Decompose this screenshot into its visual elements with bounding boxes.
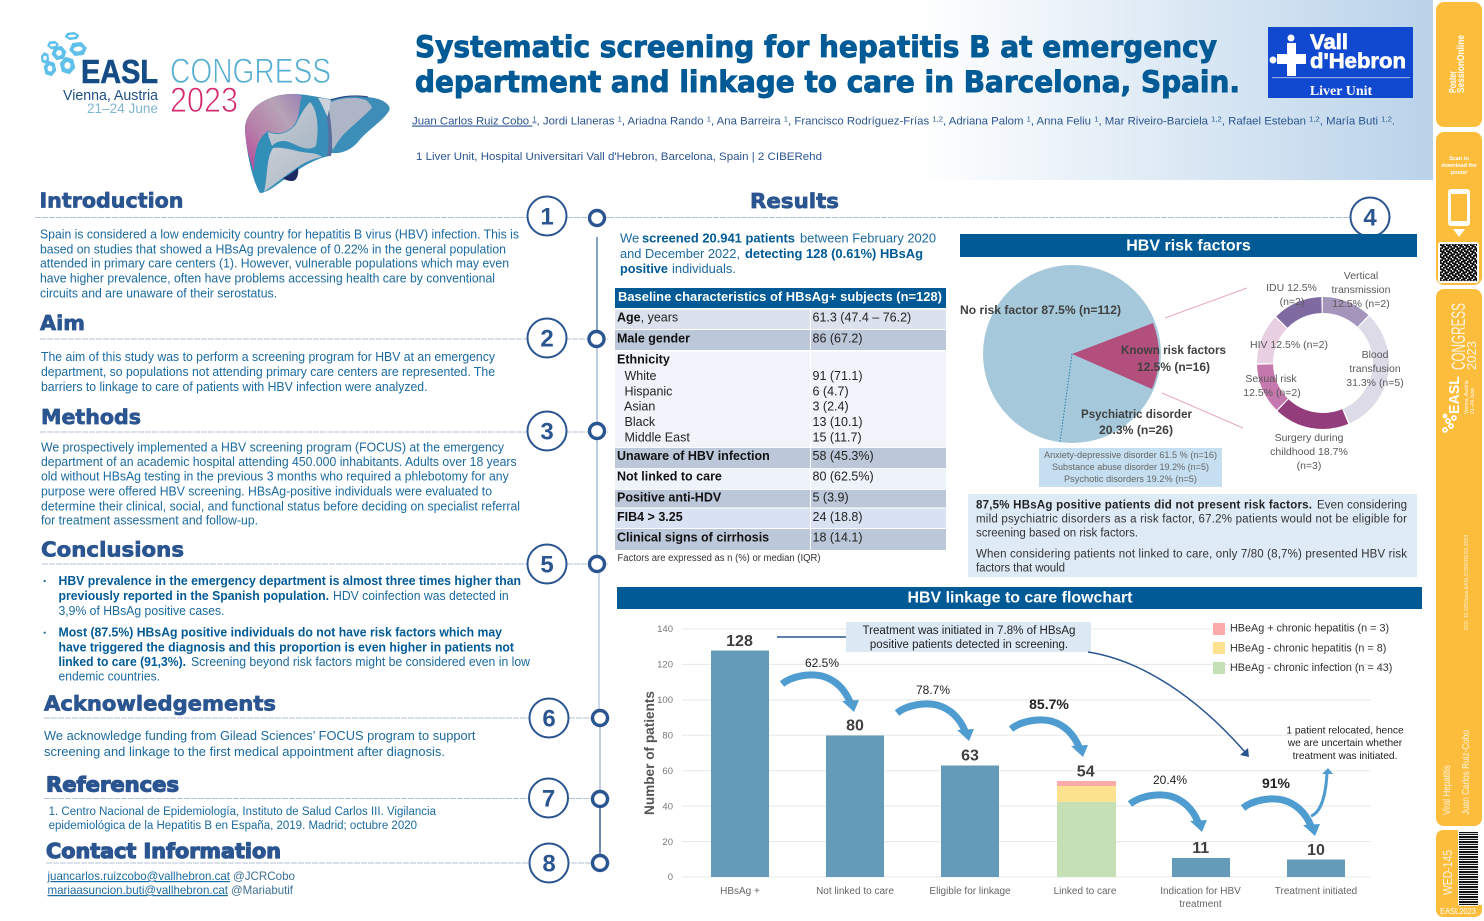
callout: risk factors finding: Even considering: [1317, 499, 1407, 511]
panel: poster info: EASL: [1446, 376, 1463, 414]
percentage labels: 91%: [1262, 775, 1291, 791]
category labels: Not linked to care: [816, 886, 894, 897]
table: baseline characteristics: 58 (45.3%): [812, 449, 874, 463]
numbered markers: 1: [540, 204, 554, 230]
authors: 1,2: [932, 114, 943, 124]
table: baseline characteristics: 6 (4.7): [812, 384, 849, 398]
panel: poster number: [1436, 830, 1482, 917]
text: aim body: barriers to linkage to care of patients with HBV infection were analyzed.: [41, 380, 428, 394]
text: acknowledgements body: We acknowledge funding from Gilead Sciences’ FOCUS program to support: [44, 729, 476, 743]
table: baseline characteristics: Age, years: [617, 311, 678, 325]
table: baseline characteristics: Black: [624, 415, 656, 429]
chart gridlines and axis: 140: [657, 624, 673, 635]
table: baseline characteristics: Unaware of HBV infection: [617, 449, 770, 463]
EASL Congress logo: 21–24 June: [87, 100, 158, 116]
text: aim body: [41, 350, 496, 394]
donut labels: childhood 18.7%: [1270, 446, 1348, 458]
donut chart: risk factor breakdown: [1241, 281, 1405, 445]
chart gridlines and axis: Number of patients: [641, 691, 657, 815]
callout: risk factors finding: [968, 494, 1417, 577]
donut labels: 12.5% (n=2): [1332, 298, 1390, 310]
bar value labels: [726, 633, 1325, 859]
table: baseline characteristics: Positive anti-HDV: [617, 491, 722, 505]
affiliations: 1 Liver Unit, Hospital Universitari Vall d'Hebron, Barcelona, Spain | 2 CIBERehd: [416, 151, 822, 163]
text: contact details: juancarlos.ruizcobo@vallhebron.cat: [47, 869, 231, 883]
panel: poster info: Viral Hepatitis: [1442, 765, 1453, 815]
table: baseline characteristics: Baseline characteristics of HBsAg+ subjects (n=128): [618, 290, 942, 304]
numbered markers: [528, 196, 1390, 882]
callout: treatment initiated: Treatment was initiated in 7.8% of HBsAg: [862, 625, 1076, 637]
pie labels: Psychiatric disorder: [1081, 407, 1192, 421]
numbered markers: 7: [542, 786, 555, 812]
authors: , Rafael Esteban: [1222, 116, 1309, 128]
panel: scan to download: poster: [1451, 170, 1468, 176]
pie labels: 12.5% (n=16): [1137, 360, 1210, 374]
percentage labels: 85.7%: [1029, 696, 1069, 712]
percentage labels: [805, 656, 1291, 791]
text: methods body: old without HBsAg testing in the previous 3 months who required a phlebotomy for any: [41, 470, 509, 484]
text: results summary: between February 2020: [800, 230, 936, 245]
legend: HBeAg - chronic infection (n = 43): [1230, 662, 1392, 674]
section divider lines: [35, 218, 1392, 863]
donut labels: (n=2): [1280, 296, 1304, 308]
authors: .: [1392, 116, 1395, 128]
heading bar: flowchart: [617, 587, 1422, 609]
table: baseline characteristics: FIB4 > 3.25: [617, 510, 683, 524]
panel: scan to download: [1436, 132, 1482, 285]
callout: risk factors finding: mild psychiatric disorders as a risk factor, 67.2% patients would not be eligible for: [976, 513, 1407, 525]
text: conclusions bullets: have triggered the diagnosis and this proportion is even higher in patients not: [58, 641, 515, 655]
Vall d'Hebron logo: [1268, 27, 1413, 99]
text: introduction body: based on studies that showed a HBsAg prevalence of 0.22% in the general population: [40, 243, 506, 257]
pie labels: No risk factor 87.5% (n=112): [960, 303, 1121, 317]
table: baseline characteristics: 61.3 (47.4 – 76.2): [812, 311, 911, 325]
heading: Conclusions: Conclusions: [41, 538, 184, 562]
donut labels: Sexual risk: [1245, 373, 1297, 385]
EASL Congress logo: EASL: [81, 53, 158, 90]
text: acknowledgements body: [44, 729, 476, 759]
authors: , Francisco Rodríguez-Frías: [788, 116, 932, 128]
panel: acknowledgements: [44, 692, 476, 759]
text: methods body: for treatment assessment and follow-up.: [41, 514, 258, 528]
authors: , Adriana Palom: [943, 116, 1027, 128]
panel: poster info: 21–24 June: [1470, 388, 1476, 414]
bar value labels: 128: [726, 633, 753, 650]
title: Systematic screening for hepatitis B at emergency: [415, 30, 1217, 64]
Vall d'Hebron logo: Vall: [1310, 31, 1348, 54]
psychiatric disorder breakdown: [1039, 448, 1222, 487]
text: methods body: [41, 441, 520, 528]
text: methods body: department of an academic hospital attending 450.000 inhabitants. Adults over 18 years: [41, 455, 517, 469]
donut labels: Blood: [1362, 349, 1389, 361]
table: baseline characteristics: White: [624, 369, 656, 383]
panel: scan to download: Scan to: [1449, 156, 1470, 162]
panel: references: [46, 773, 437, 832]
chart gridlines and axis: 20: [662, 837, 673, 848]
category labels: treatment: [1179, 899, 1222, 910]
authors: 1: [707, 114, 711, 124]
donut labels: (n=3): [1297, 460, 1321, 472]
legend: HBeAg + chronic hepatitis (n = 3): [1230, 623, 1389, 635]
text: conclusions bullets: Most (87.5%) HBsAg positive individuals do not have risk factors which may: [58, 626, 502, 640]
panel: poster info: 2023: [1464, 341, 1479, 370]
text: results summary: [620, 230, 936, 276]
text: conclusions bullets: HBV prevalence in the emergency department is almost three times higher than: [58, 574, 521, 588]
text: results summary: and December 2022,: [620, 246, 740, 261]
authors: 1: [1027, 114, 1031, 124]
panel: poster number: EASL2023: [1440, 907, 1477, 916]
icon: EASL hexagons: [40, 32, 88, 77]
donut labels: transfusion: [1349, 363, 1401, 375]
table: baseline characteristics: Factors are expressed as n (%) or median (IQR): [618, 553, 820, 564]
text: contact details: mariaasuncion.buti@vallhebron.cat: [48, 883, 229, 897]
table: baseline characteristics: 86 (67.2): [812, 332, 863, 346]
chart gridlines and axis: 120: [657, 660, 673, 670]
table: baseline characteristics: 24 (18.8): [812, 510, 863, 524]
authors: 1: [784, 114, 788, 124]
table: baseline characteristics: Male gender: [617, 332, 690, 346]
panel: scan to download: download the: [1441, 163, 1477, 169]
arrows: step transitions: [782, 675, 1320, 836]
text: conclusions bullets: [44, 574, 531, 684]
panel: poster info: Juan Carlos Ruiz-Cobo: [1461, 730, 1472, 815]
numbered markers: 8: [542, 850, 556, 878]
table: baseline characteristics: [615, 288, 946, 564]
heading bar: flowchart: HBV linkage to care flowchart: [908, 590, 1133, 606]
text: contact details: [47, 869, 295, 897]
pie labels: [960, 303, 1226, 437]
table: baseline characteristics: 80 (62.5%): [812, 470, 874, 484]
panel: poster info: CONGRESS: [1449, 303, 1470, 370]
text: introduction body: attended in primary care centers (1). However, vulnerable populations which may even: [40, 257, 509, 271]
authors: , María Buti: [1320, 116, 1381, 128]
numbered markers: 6: [542, 706, 556, 732]
heading: Contact Information: Contact Information: [46, 839, 281, 863]
authors: 1: [618, 114, 622, 124]
icon: liver illustration: [245, 94, 390, 193]
text: conclusions bullets: HDV coinfection was detected in: [333, 589, 509, 603]
authors: 1,2: [1309, 114, 1320, 124]
authors: Juan Carlos Ruiz Cobo: [412, 114, 537, 128]
text: methods body: determine their clinical, social, and functional status before deciding on specialist referral: [41, 500, 520, 514]
heading bar: HBV risk factors: [960, 234, 1417, 257]
panel: poster session online: Poster: [1448, 71, 1459, 93]
text: introduction body: [40, 228, 519, 301]
text: contact details: @JCRCobo: [233, 869, 295, 883]
pie labels: Known risk factors: [1121, 343, 1226, 357]
Vall d'Hebron logo: Liver Unit: [1310, 84, 1373, 99]
panel: introduction: [40, 188, 519, 301]
text: conclusions bullets: linked to care (91,3%).: [58, 655, 186, 669]
heading: Introduction: Introduction: [40, 188, 184, 212]
panel: contact information: [46, 839, 295, 897]
table: baseline characteristics: Hispanic: [624, 384, 672, 398]
text: conclusions bullets: endemic countries.: [58, 670, 160, 684]
text: conclusions bullets: 3,9% of HBsAg positive cases.: [58, 604, 224, 618]
chart gridlines and axis: 60: [662, 766, 673, 777]
text: methods body: We prospectively implemented a HBV screening program (FOCUS) at the emergency: [41, 441, 505, 455]
percentage labels: 20.4%: [1153, 773, 1187, 787]
panel: HBV risk factors: [960, 234, 1417, 577]
text: aim body: department, so populations not attending primary care centers are represented. The: [41, 365, 495, 379]
authors: 1,2: [1381, 114, 1392, 124]
text: aim body: The aim of this study was to perform a screening program for HBV at an emergency: [41, 350, 496, 364]
numbered markers: 2: [540, 326, 554, 352]
text: conclusions bullets: Screening beyond risk factors might be considered even in low: [191, 655, 531, 669]
text: reference entry: [49, 806, 437, 832]
psychiatric disorder breakdown: Anxiety-depressive disorder 61.5 % (n=16): [1044, 450, 1217, 461]
category labels: HBsAg +: [720, 886, 760, 897]
numbered markers: 4: [1363, 204, 1377, 232]
authors: , Ana Barreira: [711, 116, 784, 128]
category labels: Eligible for linkage: [929, 886, 1011, 897]
text: reference entry: epidemiológica de la Hepatitis B en España, 2019. Madrid; octubre 2020: [49, 820, 417, 832]
category labels: Indication for HBV: [1160, 886, 1241, 897]
panel: poster session online: [1436, 2, 1482, 127]
panel: poster info: Vienna, Austria: [1464, 380, 1470, 414]
donut labels: 12.5% (n=2): [1243, 387, 1301, 399]
authors: , Mar Riveiro-Barciela: [1098, 116, 1211, 128]
heading bar: HBV risk factors: HBV risk factors: [1126, 238, 1251, 255]
arrow: relocated patient: [1311, 768, 1333, 816]
bars: [711, 650, 1345, 877]
category labels: [720, 886, 1357, 910]
numbered markers: 5: [540, 552, 554, 578]
panel: HBV linkage to care flowchart: [617, 587, 1422, 910]
note: relocated patient: treatment was initiated.: [1293, 751, 1397, 762]
bar value labels: 54: [1077, 764, 1095, 781]
EASL Congress logo: 2023: [170, 81, 238, 120]
psychiatric disorder breakdown: Substance abuse disorder 19.2% (n=5): [1052, 462, 1209, 473]
note: relocated patient: 1 patient relocated, hence: [1286, 726, 1404, 737]
authors: , Anna Feliu: [1031, 116, 1094, 128]
text: contact details: @Mariabutif: [231, 883, 294, 897]
text: methods body: purpose were offered HBV screening. HBsAg-positive individuals were evaluated to: [41, 485, 492, 499]
donut labels: IDU 12.5%: [1266, 282, 1317, 294]
category labels: Linked to care: [1054, 886, 1117, 897]
sidebar: [1436, 2, 1482, 917]
connector lines: [1162, 288, 1247, 428]
table: baseline characteristics: Ethnicity: [617, 353, 670, 367]
table: baseline characteristics: Middle East: [624, 431, 690, 445]
donut labels: transmission: [1332, 284, 1391, 296]
note: relocated patient: we are uncertain whether: [1287, 738, 1403, 749]
table: baseline characteristics: 13 (10.1): [812, 415, 863, 429]
donut labels: Vertical: [1344, 270, 1378, 282]
panel: results: [620, 189, 936, 276]
callout: treatment initiated: positive patients detected in screening.: [870, 639, 1068, 651]
text: introduction body: circuits and are unaware of their serostatus.: [40, 287, 277, 301]
text: results summary: We: [620, 230, 639, 245]
text: acknowledgements body: screening and linkage to the first medical appointment after diagnosis.: [44, 745, 445, 759]
panel: methods: [41, 405, 520, 528]
table: baseline characteristics: 91 (71.1): [812, 369, 863, 383]
bar value labels: 10: [1307, 842, 1325, 859]
callout: risk factors finding: 87,5% HBsAg positive patients did not present risk factors.: [976, 499, 1312, 511]
chart gridlines and axis: [641, 624, 1371, 883]
heading: References: References: [46, 773, 179, 797]
donut labels: [1243, 270, 1404, 472]
authors: 1,2: [1211, 114, 1222, 124]
EASL Congress logo: [40, 32, 331, 120]
chart gridlines and axis: 100: [657, 695, 673, 706]
panel: poster info: DOI: 10.3252/pos.EASLCONGRESS.2023: [1464, 535, 1470, 630]
psychiatric disorder breakdown: Psychotic disorders 19.2% (n=5): [1064, 474, 1197, 485]
timeline: [597, 237, 600, 863]
table: baseline characteristics: 5 (3.9): [812, 491, 849, 505]
panel: aim: [40, 311, 496, 394]
panel: poster info: [1436, 289, 1482, 826]
legend: [1213, 623, 1392, 674]
table: baseline characteristics: Not linked to care: [617, 470, 722, 484]
callout: treatment initiated: [777, 622, 1249, 757]
text: conclusions bullets: previously reported in the Spanish population.: [58, 589, 329, 603]
authors: 1: [1094, 114, 1098, 124]
callout: risk factors finding: factors that would: [976, 563, 1065, 575]
donut labels: Surgery during: [1275, 432, 1344, 444]
pie chart: known risk factors: [983, 265, 1161, 443]
authors: , Ariadna Rando: [622, 116, 707, 128]
table: baseline characteristics: Clinical signs of cirrhosis: [617, 531, 769, 545]
heading: Aim: Aim: [40, 311, 85, 335]
text: results summary: positive: [620, 261, 668, 276]
bar value labels: 63: [961, 748, 979, 765]
donut labels: 31.3% (n=5): [1346, 377, 1404, 389]
heading: Acknowledgements: Acknowledgements: [44, 692, 276, 716]
panel: poster session online: SessionOnline: [1456, 35, 1467, 93]
text: introduction body: Spain is considered a low endemicity country for hepatitis B virus (HBV) infection. This is: [40, 228, 519, 242]
authors: , Jordi Llaneras: [537, 116, 618, 128]
authors: 1: [532, 114, 537, 124]
chart gridlines and axis: 0: [668, 872, 673, 883]
chart gridlines and axis: 40: [662, 802, 673, 812]
table: baseline characteristics: 15 (11.7): [812, 431, 862, 445]
table: baseline characteristics: 3 (2.4): [812, 400, 849, 414]
table: baseline characteristics: Asian: [624, 400, 655, 414]
Vall d'Hebron logo: d'Hebron: [1310, 50, 1406, 73]
pie labels: 20.3% (n=26): [1099, 423, 1173, 437]
callout: risk factors finding: screening based on risk factors.: [976, 528, 1138, 540]
text: results summary: screened 20.941 patients: [642, 230, 795, 245]
heading: Results: Results: [750, 189, 839, 213]
chart gridlines and axis: 80: [662, 730, 673, 742]
percentage labels: 62.5%: [805, 656, 839, 670]
table: baseline characteristics: 18 (14.1): [812, 531, 863, 545]
EASL Congress logo: CONGRESS: [170, 52, 331, 91]
EASL Congress logo: Vienna, Austria: [63, 88, 159, 104]
percentage labels: 78.7%: [916, 683, 950, 697]
panel: conclusions: [41, 538, 531, 684]
panel: poster number: WED-145: [1440, 850, 1455, 895]
header background: [0, 0, 1433, 180]
text: reference entry: 1. Centro Nacional de Epidemiología, Instituto de Salud Carlos III. Vigilancia: [49, 806, 437, 818]
title: [415, 30, 1240, 99]
bar value labels: 80: [846, 718, 864, 735]
text: results summary: individuals.: [672, 261, 736, 276]
heading: Methods: Methods: [41, 405, 141, 429]
text: introduction body: have higher prevalence, often have problems accessing health care by conventional: [40, 272, 495, 286]
bar value labels: 11: [1192, 840, 1209, 857]
category labels: Treatment initiated: [1275, 886, 1357, 897]
donut labels: HIV 12.5% (n=2): [1250, 339, 1328, 351]
callout: risk factors finding: When considering patients not linked to care, only 7/80 (8,7%) presented HBV risk: [976, 549, 1407, 561]
title: department and linkage to care in Barcelona, Spain.: [415, 65, 1240, 99]
numbered markers: 3: [540, 418, 554, 446]
note: relocated patient: [1286, 726, 1404, 762]
text: results summary: detecting 128 (0.61%) HBsAg: [745, 246, 923, 261]
legend: HBeAg - chronic hepatitis (n = 8): [1230, 643, 1386, 655]
